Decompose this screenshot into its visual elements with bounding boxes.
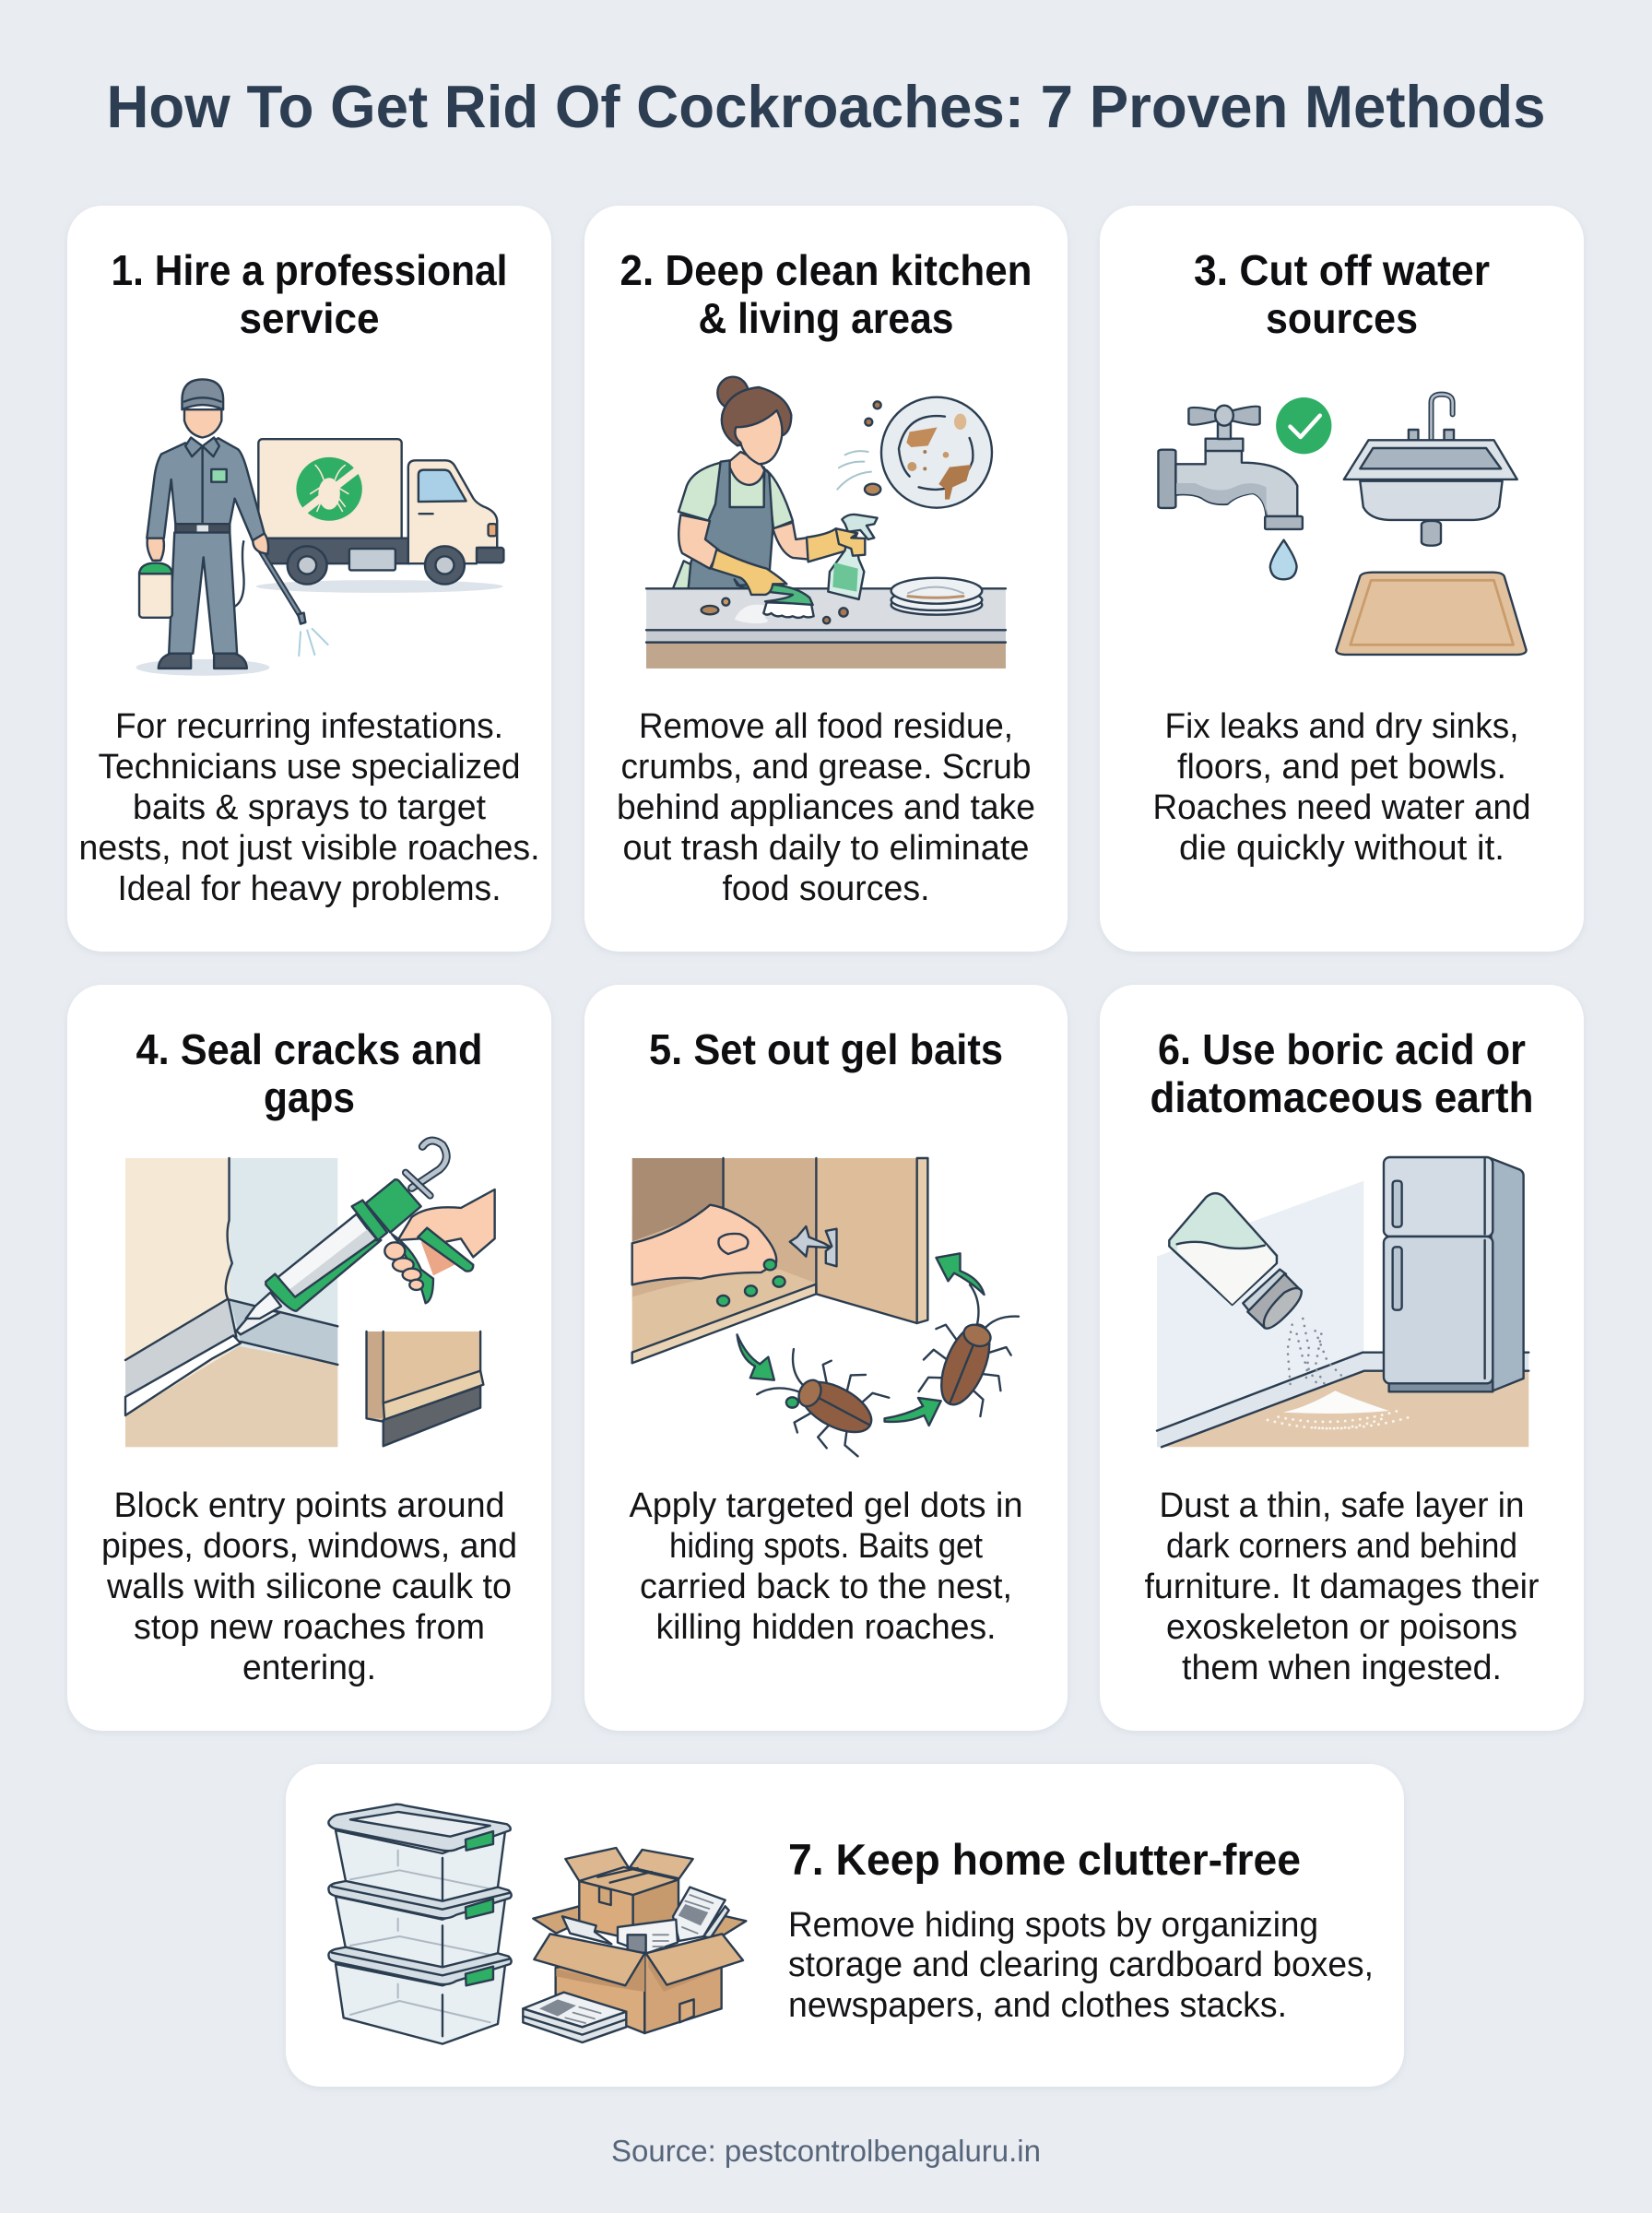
text: method 5 description: hiding spots. Baits get: [669, 1527, 983, 1566]
illustration: powder shaker and fridge: [1157, 1157, 1528, 1447]
heading: method 2: & living areas: [699, 294, 953, 342]
heading: method 3: [1194, 246, 1490, 342]
text: method 2 description: behind appliances and take: [617, 788, 1035, 827]
text: method 7 description: storage and clearing cardboard boxes,: [788, 1946, 1374, 1984]
text: method 1 description: [79, 707, 540, 908]
heading: method 6: 6. Use boric acid or: [1158, 1025, 1526, 1073]
heading: method 6: diatomaceous earth: [1150, 1073, 1534, 1121]
heading: method 5: 5. Set out gel baits: [649, 1025, 1003, 1073]
panel: 7 keep home clutter-free: [286, 1764, 1404, 2087]
text: method 4 description: stop new roaches from: [134, 1608, 485, 1647]
text: method 2 description: crumbs, and grease. Scrub: [621, 748, 1031, 787]
text: method 7 description: Remove hiding spots by organizing: [788, 1906, 1318, 1945]
text: method 4 description: walls with silicone caulk to: [106, 1568, 512, 1606]
heading: method 3: 3. Cut off water: [1194, 246, 1490, 294]
text: method 3 description: [1152, 707, 1530, 868]
text: method 3 description: floors, and pet bowls.: [1177, 748, 1506, 787]
source credit: Source: pestcontrolbengaluru.in: [611, 2134, 1041, 2168]
text: method 4 description: Block entry points around: [114, 1486, 505, 1525]
illustration: caulk gun sealing wall gap and door sweep: [125, 1141, 495, 1447]
text: method 5 description: Apply targeted gel dots in: [629, 1486, 1023, 1525]
text: method 6 description: furniture. It damages their: [1145, 1568, 1540, 1606]
heading: method 1: 1. Hire a professional: [111, 246, 507, 294]
panel: 5 set out gel baits: [584, 985, 1068, 1731]
text: method 3 description: Roaches need water and: [1152, 788, 1530, 827]
heading: method 4: gaps: [264, 1073, 355, 1121]
heading: method 4: [136, 1025, 483, 1121]
heading: method 1: [111, 246, 507, 342]
illustration: technician and pest control truck: [136, 379, 503, 676]
illustration: stacked storage bins: [328, 1805, 512, 2044]
text: method 1 description: baits & sprays to target: [133, 788, 486, 827]
heading: method 1: service: [240, 294, 380, 342]
heading: method 3: sources: [1266, 294, 1418, 342]
panel: 1 hire a professional service: [67, 206, 551, 952]
text: method 4 description: pipes, doors, windows, and: [101, 1527, 517, 1566]
text: method 4 description: [101, 1486, 517, 1687]
heading: method 4: 4. Seal cracks and: [136, 1025, 483, 1073]
text: method 6 description: [1145, 1486, 1540, 1687]
panel: 6 boric acid or diatomaceous earth: [1100, 985, 1584, 1731]
text: method 5 description: [629, 1486, 1023, 1647]
heading: method 2: [620, 246, 1032, 342]
text: method 2 description: Remove all food residue,: [639, 707, 1013, 746]
text: method 3 description: Fix leaks and dry sinks,: [1165, 707, 1519, 746]
text: method 5 description: carried back to the nest,: [640, 1568, 1012, 1606]
illustration: woman scrubbing counter: [646, 377, 1006, 669]
text: method 2 description: [617, 707, 1035, 908]
panel: 3 cut off water sources: [1100, 206, 1584, 952]
text: method 3 description: die quickly without it.: [1179, 829, 1504, 868]
illustration: faucet, sink and dry mat: [1158, 395, 1527, 655]
text: method 5 description: killing hidden roaches.: [656, 1608, 996, 1647]
text: method 2 description: out trash daily to eliminate: [623, 829, 1029, 868]
text: method 6 description: Dust a thin, safe layer in: [1160, 1486, 1525, 1525]
text: method 1 description: nests, not just visible roaches.: [79, 829, 540, 868]
text: method 1 description: Ideal for heavy problems.: [118, 870, 502, 908]
text: method 6 description: dark corners and behind: [1166, 1527, 1517, 1566]
title: How To Get Rid Of Cockroaches: 7 Proven Methods: [107, 73, 1545, 140]
heading: method 7: 7. Keep home clutter-free: [788, 1835, 1301, 1884]
text: method 6 description: exoskeleton or poisons: [1166, 1608, 1517, 1647]
illustration: gel dots in cabinet with roaches and arrows: [632, 1158, 1033, 1462]
text: method 1 description: For recurring infestations.: [115, 707, 503, 746]
heading: method 2: 2. Deep clean kitchen: [620, 246, 1032, 294]
text: method 6 description: them when ingested.: [1182, 1649, 1502, 1687]
panel: 2 deep clean kitchen: [584, 206, 1068, 952]
panel: 4 seal cracks and gaps: [67, 985, 551, 1731]
text: method 7 description: newspapers, and clothes stacks.: [788, 1986, 1287, 2025]
text: method 4 description: entering.: [242, 1649, 376, 1687]
heading: method 6: [1150, 1025, 1534, 1121]
text: method 7 description: [788, 1906, 1374, 2025]
text: method 2 description: food sources.: [723, 870, 929, 908]
text: method 1 description: Technicians use specialized: [98, 748, 520, 787]
illustration: cardboard box and newspapers: [523, 1848, 746, 2042]
